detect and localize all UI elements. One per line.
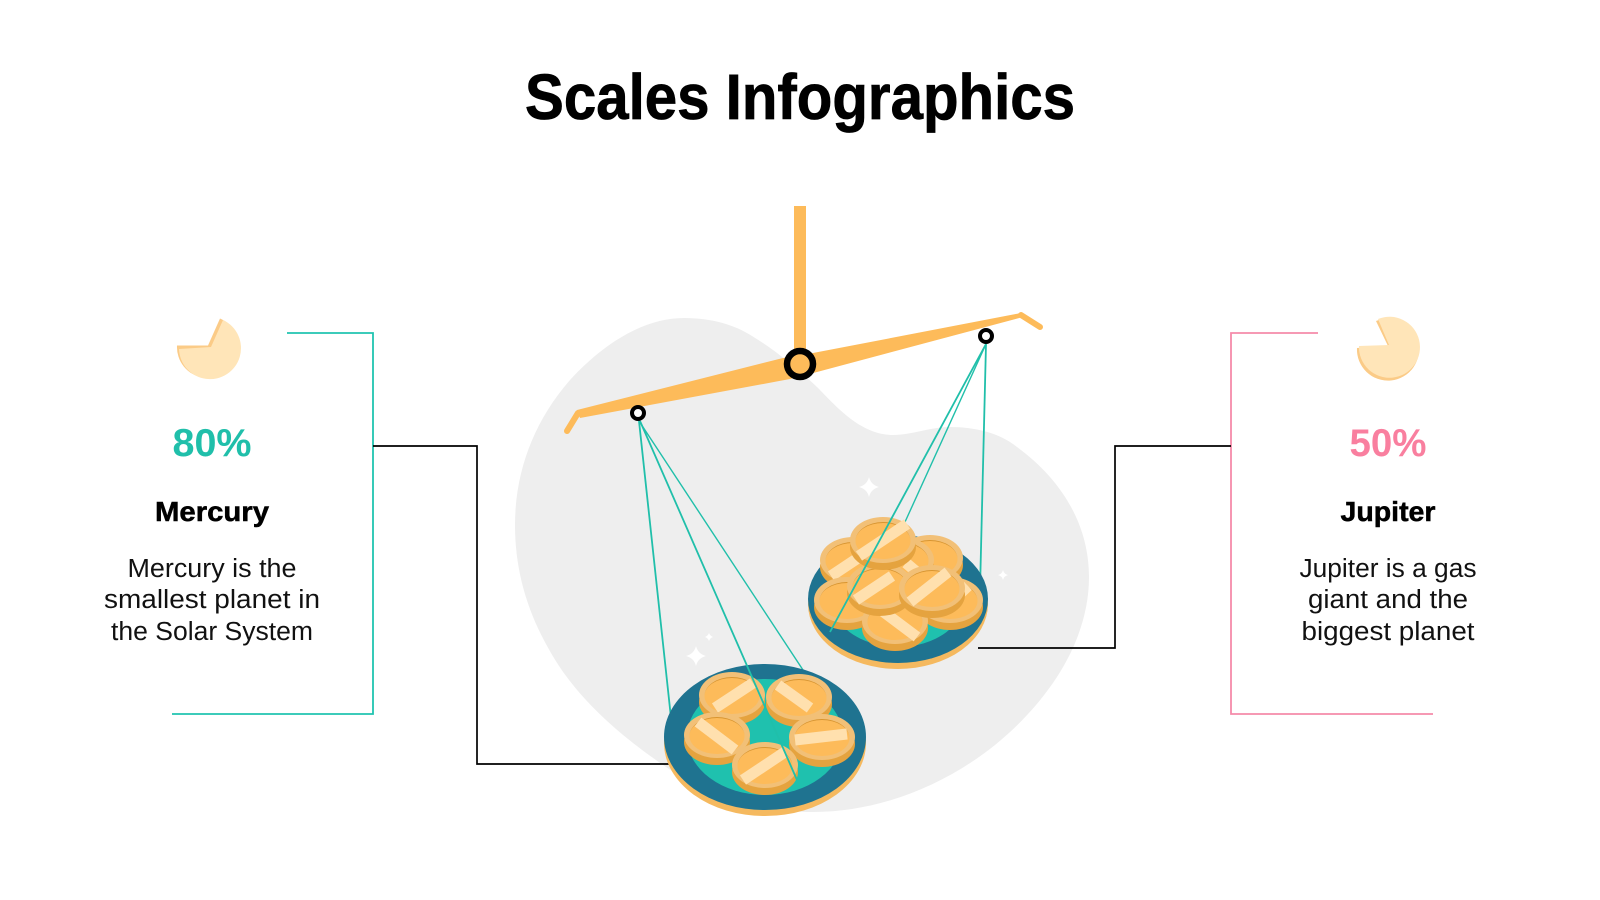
pie icon 50% [1357, 317, 1420, 381]
panel: Jupiter [1231, 317, 1476, 714]
hanger strings behind the pans [639, 344, 986, 755]
background blob [515, 318, 1089, 812]
heading Jupiter: Jupiter [1340, 496, 1436, 527]
coins left [684, 672, 855, 795]
description Mercury: Mercury is the [128, 555, 296, 583]
pie icon 80% [177, 318, 241, 379]
coins right [814, 517, 983, 651]
description Jupiter: biggest planet [1302, 618, 1474, 646]
description Jupiter: Jupiter is a gas [1300, 555, 1476, 583]
connector left [373, 446, 670, 764]
right hook ring [980, 330, 992, 342]
percentage 50%: 50% [1350, 422, 1426, 465]
description Jupiter: giant and the [1308, 586, 1468, 614]
left hook ring [632, 407, 644, 419]
title: Scales Infographics [525, 61, 1075, 133]
description Mercury: the Solar System [111, 618, 313, 646]
description Jupiter [1300, 555, 1476, 646]
front strings [640, 344, 986, 780]
teal bracket [172, 333, 373, 714]
scale beam and pole [567, 206, 1040, 431]
connector right [978, 446, 1231, 648]
heading Mercury: Mercury [155, 496, 269, 527]
description Mercury [104, 555, 320, 646]
pink bracket [1231, 333, 1433, 714]
percentage 80%: 80% [172, 422, 252, 465]
description Mercury: smallest planet in [104, 586, 320, 614]
panel: Mercury [104, 318, 373, 714]
pan left [664, 664, 866, 816]
pan right [808, 535, 988, 669]
sparkles [686, 477, 1008, 666]
pivot ring [787, 351, 813, 377]
